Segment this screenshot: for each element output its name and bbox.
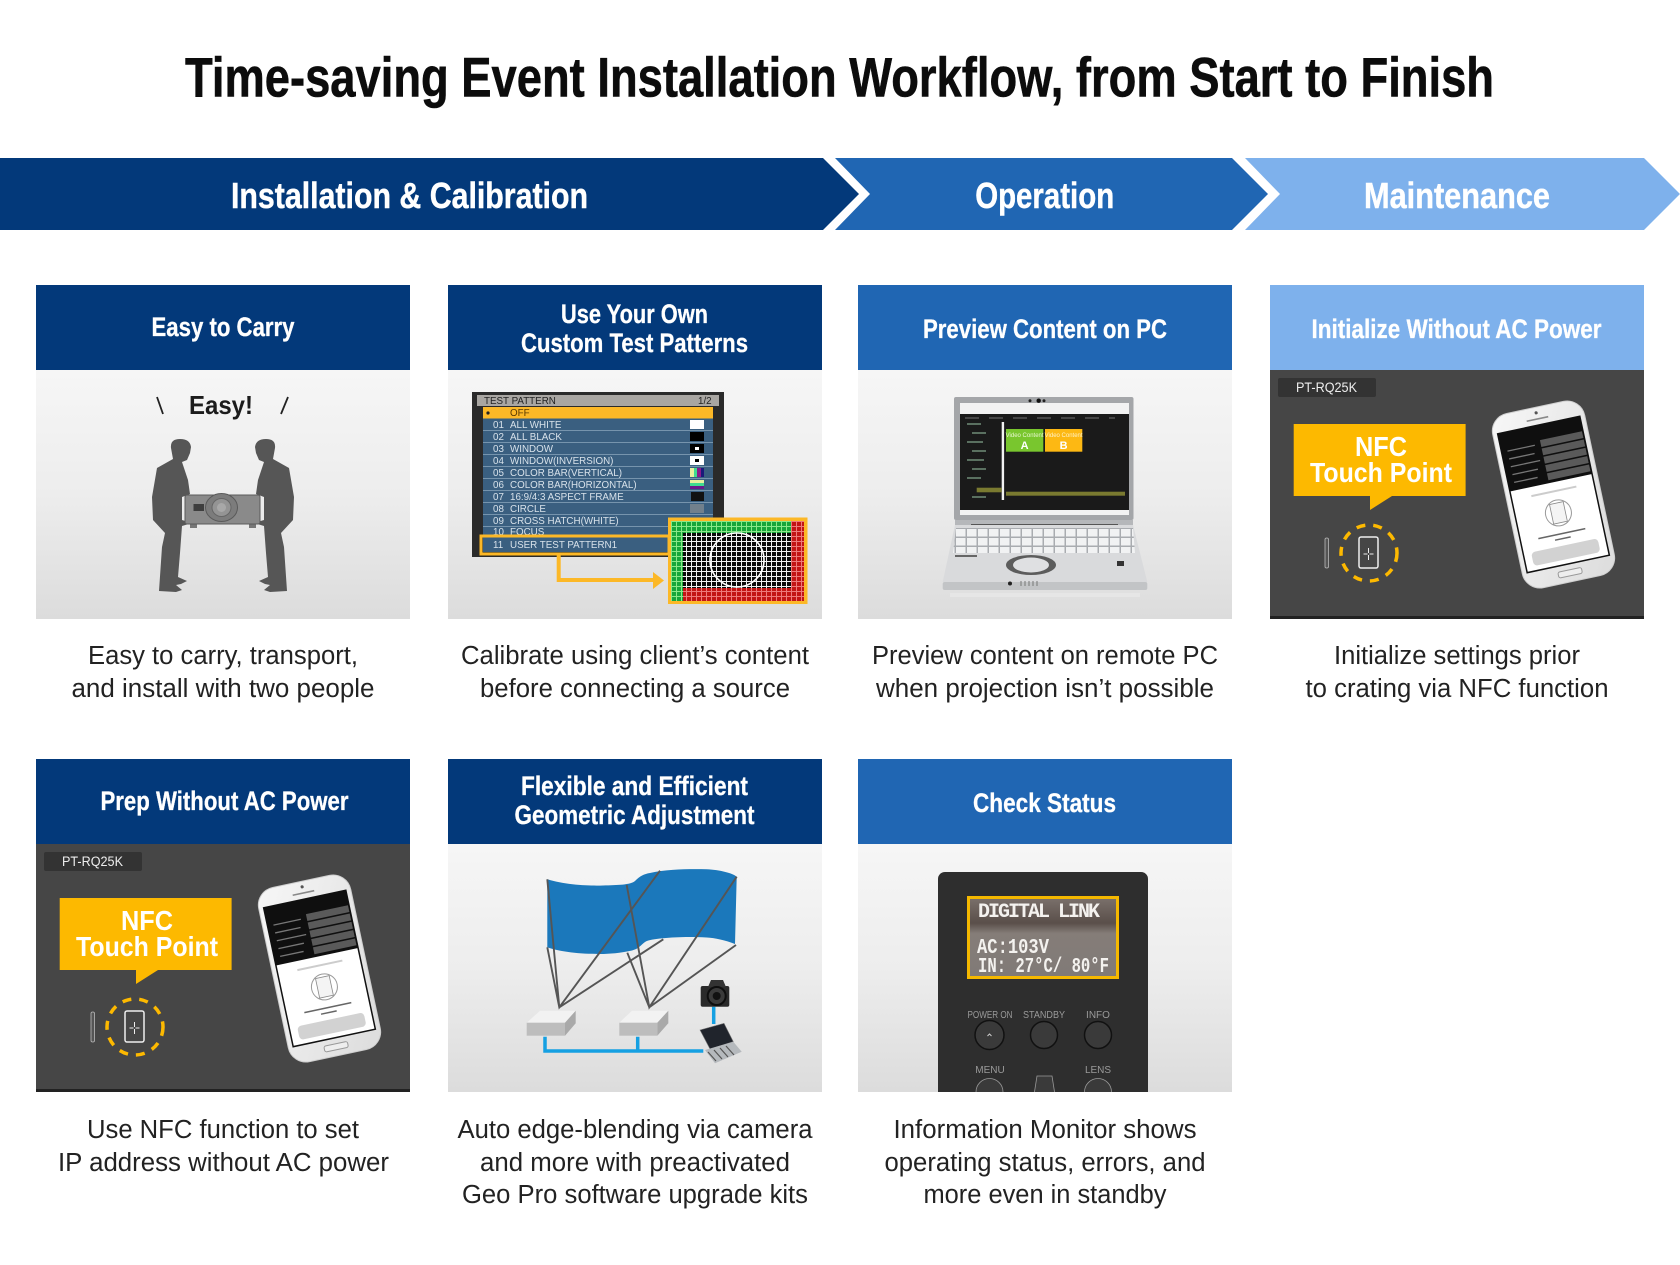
- illustration: test pattern menu: 11: [493, 540, 503, 551]
- display: DIGITAL LINK: [978, 901, 1100, 924]
- caption: and install with two people: [72, 675, 374, 703]
- illustration: test pattern menu: 04: [493, 456, 504, 467]
- icon: small laptop: [700, 1023, 742, 1063]
- control buttons: INFO: [1086, 1010, 1110, 1021]
- header: Initialize Without AC Power: [1312, 314, 1602, 344]
- header: Geometric Adjustment: [514, 800, 754, 830]
- header: Flexible and Efficient: [521, 771, 748, 801]
- header: Use Your Own: [561, 299, 708, 329]
- illustration: test pattern menu: 02: [493, 432, 504, 443]
- test pattern image: [668, 518, 808, 604]
- arrow: Maintenance: [1245, 158, 1680, 230]
- illustration: test pattern menu: [448, 370, 822, 619]
- illustration: test pattern menu: 09: [493, 516, 504, 527]
- illustration: test pattern menu: FOCUS: [510, 527, 545, 538]
- caption: [72, 642, 374, 703]
- illustration: test pattern menu: USER TEST PATTERN1: [510, 540, 617, 551]
- header: Prep Without AC Power: [100, 786, 349, 816]
- caption: Geo Pro software upgrade kits: [462, 1181, 808, 1209]
- panel: Check Status: [858, 759, 1232, 1209]
- arrow: Installation & Calibration: Installation & Calibration: [231, 175, 588, 216]
- illustration: test pattern menu: WINDOW(INVERSION): [510, 456, 613, 467]
- illustration: test pattern menu: ALL BLACK: [510, 432, 562, 443]
- callout: NFC Touch Point: [1294, 424, 1466, 510]
- caption: [458, 1116, 813, 1209]
- caption: Easy to carry, transport,: [88, 642, 358, 670]
- illustration: test pattern menu: 1/2: [698, 396, 712, 407]
- illustration: test pattern menu: OFF: [510, 408, 530, 419]
- illustration: test pattern menu: 05: [493, 468, 504, 479]
- header: [36, 285, 410, 370]
- callout: NFC Touch Point: NFC: [121, 905, 173, 936]
- caption: Auto edge-blending via camera: [458, 1116, 813, 1144]
- callout: NFC Touch Point: [60, 898, 232, 984]
- callout: NFC Touch Point: Touch Point: [76, 931, 218, 962]
- callout: NFC Touch Point: Touch Point: [1310, 457, 1452, 488]
- illustration: test pattern menu: 16:9/4:3 ASPECT FRAME: [510, 492, 624, 503]
- illustration: NFC: [1270, 370, 1644, 619]
- illustration: test pattern menu: 08: [493, 504, 504, 515]
- panel: Prep Without AC Power: [36, 759, 410, 1177]
- arrow: Installation & Calibration: [0, 158, 859, 230]
- illustration: laptop: [858, 370, 1232, 619]
- illustration: test pattern menu: 10: [493, 527, 504, 538]
- illustration: laptop: A: [1021, 440, 1029, 452]
- illustration: test pattern menu: WINDOW: [510, 444, 554, 455]
- header: Easy to Carry: [152, 312, 294, 342]
- arrow: Maintenance: Maintenance: [1364, 175, 1550, 216]
- header: Check Status: [973, 788, 1116, 818]
- model tag: [1278, 378, 1376, 397]
- illustration: curved screen and projectors: [448, 844, 822, 1092]
- icon: NFC touch target: [91, 999, 163, 1055]
- caption: Initialize settings prior: [1334, 642, 1580, 670]
- caption: before connecting a source: [480, 675, 790, 703]
- caption: [884, 1116, 1206, 1209]
- model tag: PT-RQ25K: [62, 854, 123, 869]
- arrow: menu to pattern: [559, 555, 664, 589]
- control buttons: STANDBY: [1023, 1010, 1065, 1021]
- phone: [1489, 398, 1618, 591]
- panel: Geometric Adjustment: [448, 759, 822, 1209]
- illustration: test pattern menu: TEST PATTERN: [484, 396, 556, 407]
- control buttons: POWER ON: [968, 1010, 1012, 1021]
- caption: IP address without AC power: [58, 1149, 390, 1177]
- caption: more even in standby: [924, 1181, 1167, 1209]
- illustration: test pattern menu: 06: [493, 480, 504, 491]
- illustration: test pattern menu: COLOR BAR(HORIZONTAL): [510, 480, 637, 491]
- illustration: test pattern menu: CIRCLE: [510, 504, 546, 515]
- illustration: laptop: Video Content: [1045, 433, 1083, 439]
- header: [448, 285, 822, 370]
- illustration: two people carrying projector: [36, 370, 410, 619]
- header: Custom Test Patterns: [521, 328, 748, 358]
- illustration: two people carrying projector: Easy!: [189, 390, 253, 420]
- panel: Initialize Without AC Power: [1270, 285, 1644, 703]
- caption: [461, 642, 809, 703]
- arrow: Operation: [835, 158, 1268, 230]
- header: [858, 285, 1232, 370]
- panel: Easy to Carry: [36, 285, 410, 703]
- caption: to crating via NFC function: [1306, 675, 1608, 703]
- illustration: test pattern menu: 03: [493, 444, 504, 455]
- illustration: test pattern menu: 01: [493, 420, 504, 431]
- icon: camera: [701, 980, 729, 1007]
- caption: [1306, 642, 1608, 703]
- panel: Preview Content on PC: [858, 285, 1232, 703]
- caption: and more with preactivated: [480, 1149, 790, 1177]
- display: [968, 898, 1118, 979]
- icon: NFC touch target: [1325, 525, 1397, 581]
- illustration: laptop: B: [1060, 440, 1068, 452]
- illustration: NFC: [36, 844, 410, 1092]
- control buttons: LENS: [1085, 1065, 1111, 1076]
- workflow banner: [0, 158, 1680, 230]
- illustration: laptop: Video Content: [1006, 433, 1044, 439]
- caption: operating status, errors, and: [884, 1149, 1206, 1177]
- illustration: test pattern menu: ALL WHITE: [510, 420, 562, 431]
- panel: Custom Test Patterns: [448, 285, 822, 703]
- display: AC:103V: [977, 937, 1049, 960]
- display: IN: 27°C/ 80°F: [978, 956, 1109, 979]
- model tag: [44, 852, 142, 871]
- illustration: test pattern menu: CROSS HATCH(WHITE): [510, 516, 619, 527]
- caption: [58, 1116, 390, 1177]
- header: [1270, 285, 1644, 370]
- caption: Use NFC function to set: [87, 1116, 359, 1144]
- illustration: test pattern menu: COLOR BAR(VERTICAL): [510, 468, 622, 479]
- illustration: information monitor: [858, 844, 1232, 1112]
- caption: Preview content on remote PC: [872, 642, 1218, 670]
- callout: NFC Touch Point: NFC: [1355, 431, 1407, 462]
- illustration: test pattern menu: 07: [493, 492, 504, 503]
- model tag: PT-RQ25K: [1296, 380, 1357, 395]
- header: [858, 759, 1232, 844]
- arrow: Operation: Operation: [975, 175, 1114, 216]
- phone: [255, 872, 384, 1065]
- header: [448, 759, 822, 844]
- caption: [872, 642, 1218, 703]
- caption: Information Monitor shows: [894, 1116, 1196, 1144]
- control buttons: [968, 1011, 1112, 1092]
- control buttons: MENU: [975, 1065, 1005, 1076]
- caption: when projection isn’t possible: [875, 675, 1214, 703]
- header: [36, 759, 410, 844]
- caption: Calibrate using client’s content: [461, 642, 809, 670]
- header: Preview Content on PC: [923, 314, 1167, 344]
